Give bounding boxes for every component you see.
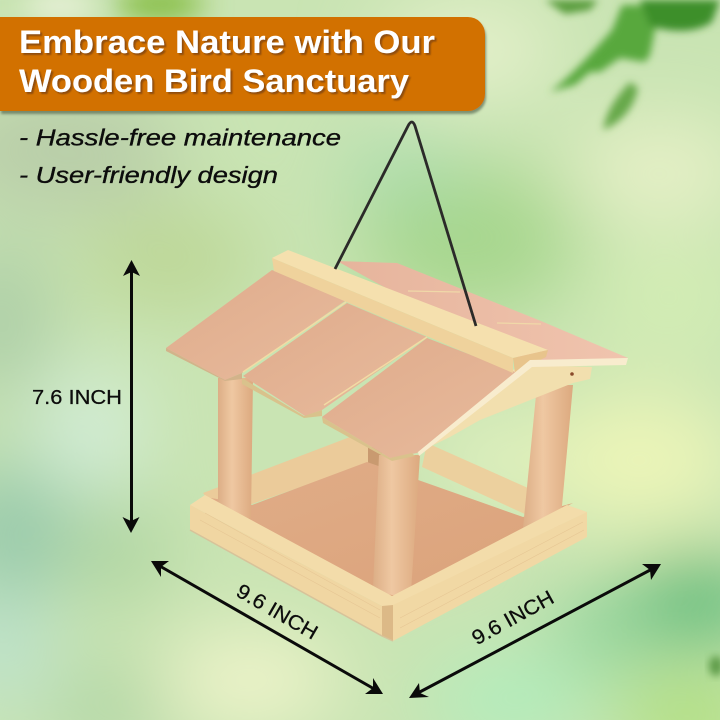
tray front (190, 495, 587, 641)
ridge board (272, 250, 548, 373)
title: Wooden Bird Sanctuary (19, 63, 409, 99)
post: front centre (373, 455, 420, 595)
back roof panel (337, 261, 628, 362)
hanging wire (335, 122, 476, 326)
gable end (417, 365, 592, 453)
feature list: - Hassle-free maintenance (19, 124, 341, 150)
title: Embrace Nature with Our (19, 24, 435, 60)
feature list: - User-friendly design (19, 162, 278, 188)
arrow: diagonal left (151, 561, 383, 694)
roof panels and seams (166, 270, 530, 461)
roof right edge strip (418, 358, 628, 456)
post: back centre (368, 447, 382, 467)
width dimension (151, 561, 383, 694)
post: rear right (523, 385, 573, 528)
post: rear left (218, 378, 253, 518)
title (19, 24, 435, 99)
back rails of the tray (203, 437, 528, 515)
banner background (0, 17, 485, 111)
heading banner (0, 17, 485, 111)
arrow: vertical (122, 260, 140, 533)
foliage: blurred leaves, top right (545, 0, 720, 130)
height dimension (32, 260, 140, 533)
label: depth: 9.6 INCH (468, 586, 558, 650)
feature list (19, 124, 341, 188)
bird feeder (166, 122, 628, 641)
depth dimension (409, 564, 661, 698)
label: height: 7.6 INCH (32, 386, 122, 409)
arrow: diagonal right (409, 564, 661, 698)
tray floor (205, 462, 573, 597)
label: width: 9.6 INCH (232, 580, 322, 644)
